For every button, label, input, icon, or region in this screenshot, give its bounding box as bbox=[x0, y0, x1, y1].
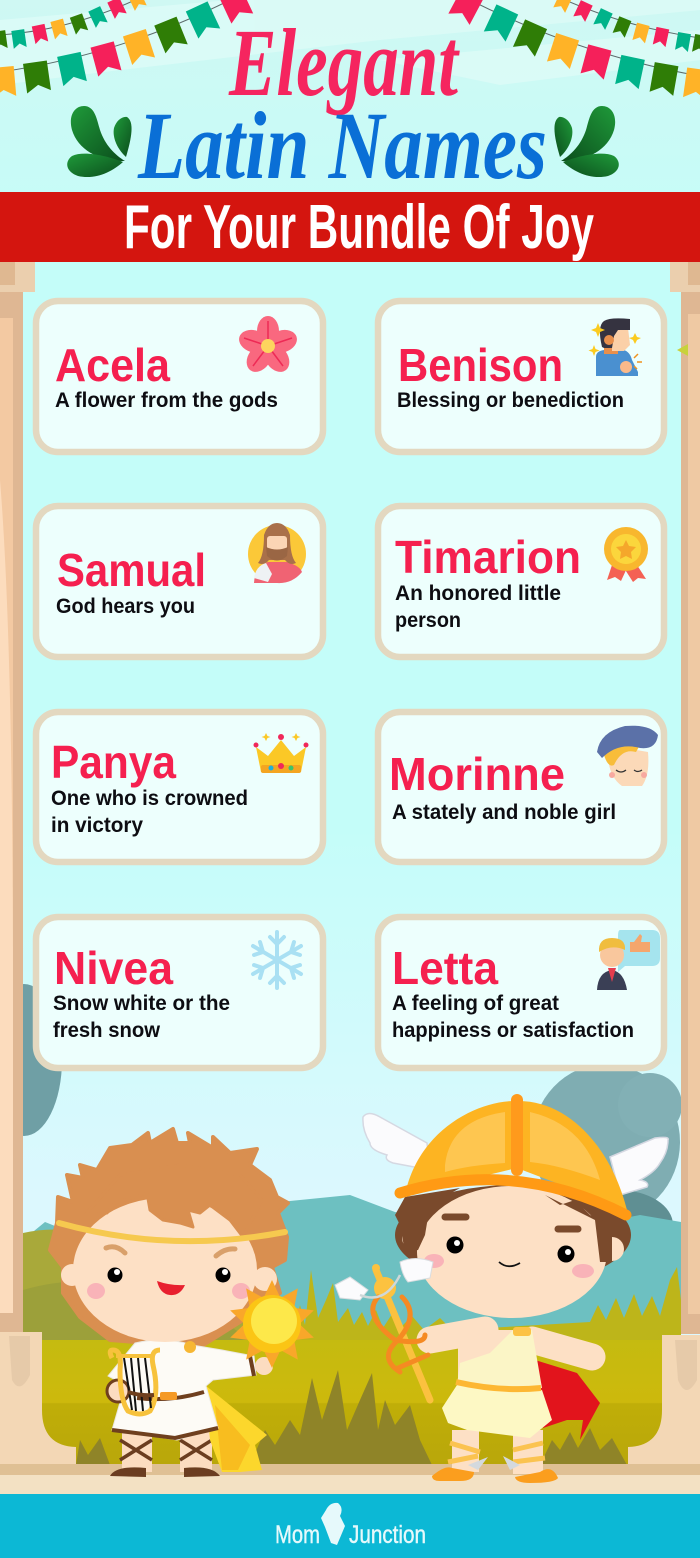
card: Acela: Acela bbox=[55, 339, 170, 391]
card: Samual: God hears you bbox=[56, 595, 195, 618]
icon: flower bbox=[236, 316, 300, 377]
hair back bbox=[50, 1129, 288, 1347]
card: Letta: Letta bbox=[392, 942, 498, 994]
left pillar bbox=[0, 262, 76, 1465]
title line: Latin Names: Latin Names bbox=[137, 92, 547, 199]
eyes bbox=[446, 1236, 574, 1262]
yellow cape bbox=[205, 1385, 267, 1472]
helmet bbox=[400, 1100, 627, 1215]
icon: medal bbox=[604, 527, 648, 582]
card: Timarion: An honored little bbox=[395, 582, 561, 605]
card: Nivea: fresh snow bbox=[53, 1019, 161, 1042]
right wing bbox=[610, 1137, 668, 1195]
belt bbox=[456, 1382, 541, 1389]
MomJunction logo: Junction bbox=[349, 1521, 426, 1549]
card: Morinne: Morinne bbox=[389, 748, 565, 800]
hair fringe bbox=[85, 1165, 262, 1237]
icon: crown bbox=[254, 733, 308, 773]
sun bbox=[227, 1280, 317, 1368]
card: Acela bbox=[36, 301, 323, 452]
character: winged-helmet boy with staff bbox=[335, 1100, 668, 1483]
card: Nivea: Snow white or the bbox=[53, 992, 230, 1015]
icon: man with sparkles bbox=[588, 318, 642, 376]
head bbox=[73, 1198, 257, 1342]
headband bbox=[59, 1223, 285, 1241]
card: Samual bbox=[36, 506, 323, 657]
cape bbox=[535, 1360, 600, 1440]
card: Nivea bbox=[36, 917, 323, 1068]
card: Panya: Panya bbox=[51, 736, 176, 788]
card: Letta: happiness or satisfaction bbox=[392, 1019, 634, 1042]
card: Benison bbox=[378, 301, 664, 452]
red banner bbox=[0, 192, 700, 262]
icon: man with thumbs up bbox=[597, 930, 660, 990]
staff with wings and snakes bbox=[335, 1258, 433, 1400]
cream tunic top bbox=[457, 1330, 542, 1388]
right pillar bbox=[628, 262, 700, 1465]
left wing bbox=[363, 1114, 430, 1170]
card: Morinne bbox=[378, 712, 664, 862]
brows bbox=[106, 1247, 235, 1256]
icon: left leaves bbox=[67, 106, 132, 177]
icon: right leaves bbox=[554, 106, 619, 177]
card: Nivea: Nivea bbox=[54, 942, 173, 994]
title line: Elegant: Elegant bbox=[228, 9, 460, 116]
head bbox=[417, 1186, 607, 1318]
card: Letta: A feeling of great bbox=[392, 992, 559, 1015]
footer bar bbox=[0, 1494, 700, 1558]
icon: lady with hat bbox=[597, 726, 658, 786]
card: Morinne: A stately and noble girl bbox=[392, 801, 616, 824]
MomJunction logo: Mom bbox=[275, 1521, 320, 1549]
card: Panya: in victory bbox=[51, 814, 143, 837]
character: boy with lyre and sun bbox=[50, 1129, 317, 1477]
eyes bbox=[108, 1268, 230, 1282]
card: Acela: A flower from the gods bbox=[55, 389, 278, 412]
card: Panya bbox=[36, 712, 323, 862]
mouth bbox=[499, 1262, 520, 1266]
decorative sky streaks bbox=[0, 0, 700, 85]
torso bbox=[458, 1330, 540, 1385]
skirt bbox=[442, 1385, 552, 1438]
icon: snowflake bbox=[253, 932, 301, 988]
lyre bbox=[107, 1350, 160, 1414]
icon: bearded man bbox=[248, 523, 306, 583]
background scene: trees, hills and grass bbox=[0, 984, 682, 1465]
card: Samual: Samual bbox=[57, 544, 206, 596]
card: Benison: Benison bbox=[398, 339, 563, 391]
arms bbox=[430, 1330, 592, 1357]
bunting right bbox=[448, 0, 700, 101]
hair fringe bbox=[395, 1188, 460, 1252]
legs and sandals bbox=[432, 1430, 558, 1483]
logo mark bbox=[321, 1503, 345, 1545]
ground strip bbox=[0, 1464, 700, 1495]
brows bbox=[445, 1217, 578, 1229]
legs and sandals bbox=[110, 1432, 220, 1477]
hair back bbox=[395, 1185, 631, 1285]
mouth bbox=[157, 1281, 185, 1295]
card: Panya: One who is crowned bbox=[51, 787, 248, 810]
bunting left bbox=[0, 0, 253, 98]
cheeks bbox=[87, 1283, 250, 1299]
card: Timarion bbox=[378, 506, 664, 657]
card: Timarion: person bbox=[395, 609, 461, 632]
white tunic bbox=[108, 1340, 256, 1440]
MomJunction logo bbox=[275, 1503, 426, 1549]
card: Letta bbox=[378, 917, 664, 1068]
cheeks bbox=[424, 1254, 594, 1278]
card: Benison: Blessing or benediction bbox=[397, 389, 624, 412]
card: Timarion: Timarion bbox=[395, 531, 581, 583]
